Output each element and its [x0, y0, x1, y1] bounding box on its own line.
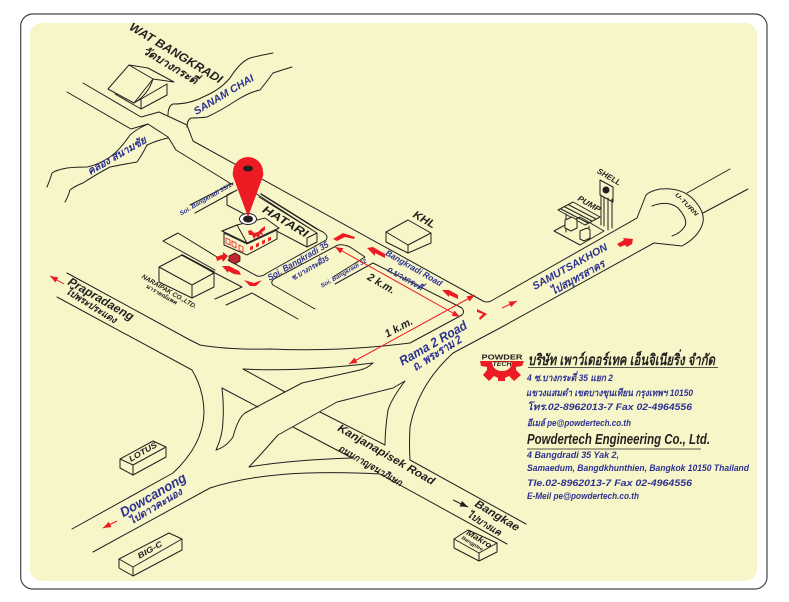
company block: Thai — [526, 349, 718, 428]
address lines English: 4 Bangdradi 35 Yak 2, — [526, 450, 619, 460]
label: Khlong Sanam Chai: คลอง สนามชัย — [85, 133, 150, 178]
label: Shell: SHELL — [595, 167, 623, 187]
company block: Thai: อีเมล์ pe@powdertech.co.th — [527, 417, 631, 428]
label: Naraipak Thai: นารายณ์แพค — [144, 283, 178, 307]
company block: English: Tle.02-8962013-7 Fax 02-4964556 — [527, 478, 693, 489]
building: Makro — [454, 530, 497, 561]
building: KHL — [386, 220, 431, 253]
label: 1 km: 1 k.m. — [383, 316, 415, 340]
icon: Wat Bangkradi temple — [108, 65, 174, 109]
road network — [57, 83, 748, 552]
label: Bangkae Thai: ไปบางแค — [465, 508, 504, 539]
logo: Powdertech gear — [480, 352, 524, 381]
company block: Thai: โทร.02-8962013-7 Fax 02-4964556 — [527, 401, 693, 413]
label: Soi Bangkradi 35/1: Soi. Bangkradi 35/1 — [179, 182, 234, 217]
label: Bangkae: Bangkae — [472, 498, 522, 534]
building: Lotus — [120, 441, 166, 475]
label: U-turn: U-TURN — [673, 192, 699, 218]
company block: English: Samaedum, Bangdkhunthien, Bangkok 10150 Thailand — [527, 463, 749, 473]
label: Wat Bangkradi: WAT BANGKRADI — [127, 20, 226, 87]
label: Kanjanapisek Road Thai: ถนนกาญจนาภิเษก — [336, 443, 405, 489]
label: Bangkradi Road Thai: ถ.บางกระดี่ — [385, 263, 427, 293]
thin arrows — [50, 276, 517, 528]
label: Prapradaeng Thai: ไปพระประแดง — [63, 285, 120, 327]
logo: Powdertech gear: POWDER — [482, 352, 523, 362]
building: Big-C — [119, 533, 182, 576]
label: KHL: KHL — [411, 209, 438, 231]
red direction arrows — [216, 233, 633, 320]
label: Sanam Chai: SANAM CHAI — [192, 72, 257, 118]
label: Makro Bangplee: Bangplee — [460, 535, 484, 553]
label: Hatari: HATARI — [260, 204, 311, 241]
icon: Powdertech factory — [222, 218, 279, 264]
company block: Thai: แขวงแสมดำ เขตบางขุนเทียน กรุงเทพฯ 10150 — [526, 387, 694, 399]
label: Samutsakhon: SAMUTSAKHON — [530, 241, 610, 293]
label: Prapradaeng: Prapradaeng — [65, 274, 137, 324]
label: Kanjanapisek Road: Kanjanapisek Road — [335, 422, 437, 488]
label: Soi Bangkradi 32: Soi. Bangkradi 32 — [320, 258, 369, 290]
label: Soi Bangkradi 35: Soi. Bangkradi 35 — [266, 239, 331, 283]
label: Soi Bangkradi 35 Thai: ซ.บางกระดี่35 — [289, 252, 331, 282]
icon: location pin — [233, 157, 263, 224]
building: Hatari strip — [227, 192, 317, 247]
label: Dowcanong: Dowcanong — [117, 470, 189, 520]
company block: English: E-Meil pe@powdertech.co.th — [527, 491, 639, 501]
label: Rama 2 Road: Rama 2 Road — [396, 317, 470, 368]
label: Rama 2 Road Thai: ถ. พระราม 2 — [410, 332, 465, 374]
logo: Powdertech gear: TECH — [492, 361, 512, 368]
label: Dowcanong Thai: ไปดาวคะนอง — [126, 485, 186, 527]
label: 2 km: 2 k.m. — [364, 271, 397, 297]
building: Naraipak — [159, 255, 214, 298]
label: Makro: Makro — [465, 528, 493, 550]
label: Samutsakhon Thai: ไปสมุทรสาคร — [548, 256, 609, 299]
distance arrows — [335, 247, 475, 364]
label: Lotus: LOTUS — [127, 440, 159, 464]
icon: Shell pump station — [554, 180, 613, 245]
company block: English — [526, 432, 749, 501]
canals — [47, 53, 292, 202]
label: Bangkradi Road: Bangkradi Road — [384, 248, 445, 289]
address lines Thai: 4 ซ.บางกระดี่ 35 แยก 2 — [526, 371, 614, 384]
company name Thai: บริษัท เพาว์เดอร์เทค เอ็นจิเนียริ่ง จำกัด — [528, 349, 716, 369]
label: Big-C: BIG-C — [136, 539, 164, 561]
label: Naraipak Co Ltd: NARAIPAK CO.,LTD. — [140, 273, 198, 311]
label: Pump: PUMP — [576, 194, 603, 214]
label: Wat Bangkradi Thai: วัดบางกระดี่ — [140, 42, 204, 89]
company name English: Powdertech Engineering Co., Ltd. — [527, 432, 710, 448]
